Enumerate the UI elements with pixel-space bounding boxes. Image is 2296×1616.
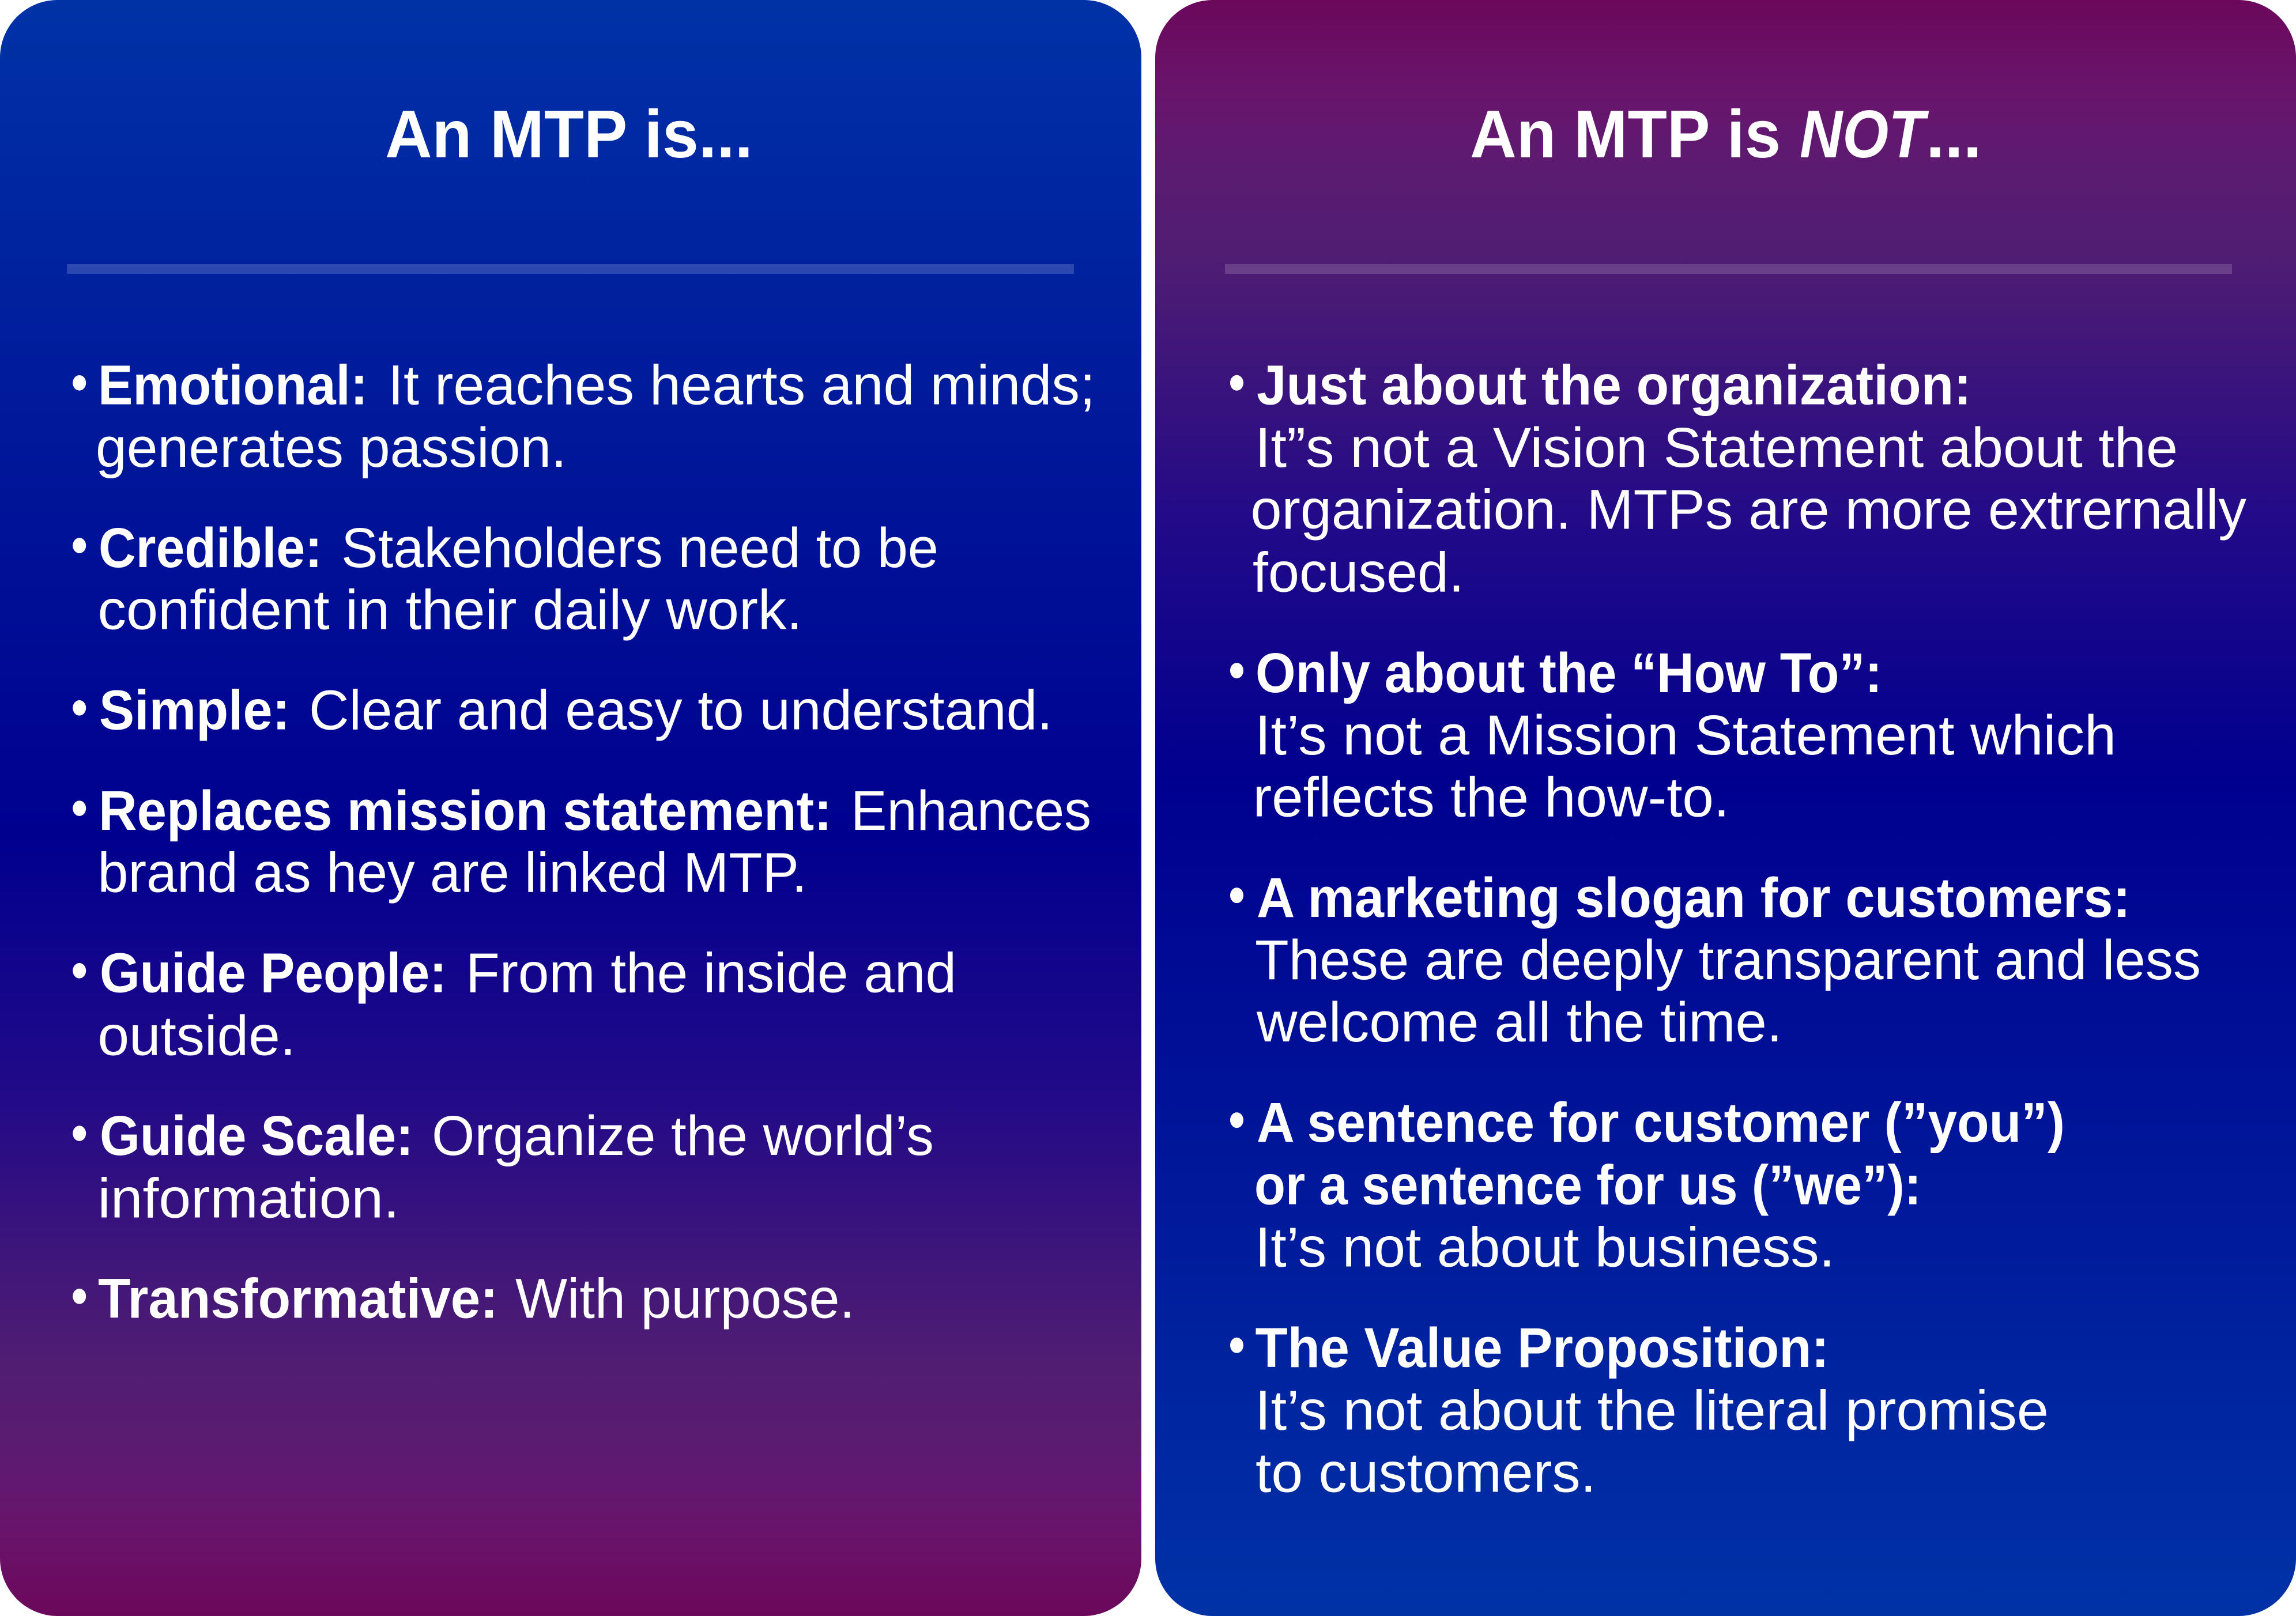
item: Replaces mission statement: Enhances <box>851 779 1091 842</box>
item: Only about the How To: Only about the “How To”: <box>1256 641 1882 704</box>
item: Replaces mission statement: Replaces mission statement: <box>99 779 832 842</box>
item: Guide Scale <box>73 1104 934 1230</box>
heading: An MTP is...: An MTP is... <box>385 96 753 172</box>
item: Simple: Clear and easy to understand. <box>309 679 1053 742</box>
panel: An MTP is NOT <box>1155 0 2296 1616</box>
item: Only about the How To: reflects the how-to. <box>1253 766 1729 829</box>
heading: An MTP is NOT...: NOT <box>1800 96 1929 172</box>
item: Guide Scale: information. <box>98 1167 399 1230</box>
item: Transformative <box>73 1267 855 1330</box>
panel background left <box>0 0 1141 1616</box>
item: A marketing slogan for customers: A marketing slogan for customers: <box>1257 866 2131 929</box>
item: Emotional: It reaches hearts and minds; <box>388 354 1095 417</box>
heading: An MTP is NOT...: ... <box>1926 96 1982 172</box>
item: Guide Scale: Guide Scale: <box>100 1104 413 1167</box>
item: Simple: Simple: <box>99 679 290 742</box>
item: The Value Proposition: to customers. <box>1256 1441 1596 1504</box>
item: Credible: Stakeholders need to be <box>341 516 938 579</box>
item: Transformative: Transformative: <box>98 1267 498 1330</box>
item: Replaces mission statement: brand as hey are linked MTP. <box>98 841 807 904</box>
item: The Value Proposition: The Value Proposition: <box>1256 1316 1829 1379</box>
item: Only about the How To <box>1230 641 2116 829</box>
item: Just about the organization: organization. MTPs are more extrernally <box>1251 478 2246 541</box>
item: A marketing slogan for customers: These are deeply transparent and less <box>1255 928 2201 991</box>
item: A marketing slogan for customers: welcome all the time. <box>1256 991 1782 1054</box>
item: Emotional: generates passion. <box>96 416 567 479</box>
heading: An MTP is NOT...: An MTP is <box>1470 96 1781 172</box>
heading: An MTP is NOT... <box>1470 96 1982 172</box>
item: Emotional: Emotional: <box>98 354 368 417</box>
item: Emotional <box>73 354 1095 479</box>
item: Transformative: With purpose. <box>515 1267 855 1330</box>
item: Guide Scale: Organize the world’s <box>432 1104 934 1167</box>
item: Just about the organization: Just about the organization: <box>1257 354 1971 417</box>
item: A marketing slogan for customers <box>1230 866 2201 1054</box>
item: A sentence for customer or us: A sentence for customer (”you”) <box>1257 1091 2065 1154</box>
panel: An MTP is <box>0 0 1141 1616</box>
item: Only about the How To: It’s not a Mission Statement which <box>1255 704 2116 767</box>
item: A sentence for customer or us: or a sentence for us (”we”): <box>1254 1154 1921 1216</box>
item: Credible <box>73 516 938 641</box>
item: Guide People: From the inside and <box>466 942 956 1005</box>
item: Guide People: Guide People: <box>100 942 447 1005</box>
item: Credible: confident in their daily work. <box>98 579 802 641</box>
item: The Value Proposition: It’s not about the literal promise <box>1255 1379 2049 1442</box>
panel background right <box>1155 0 2296 1616</box>
item: Guide People <box>73 942 956 1067</box>
item: The Value Proposition <box>1230 1316 2049 1504</box>
item: Replaces mission statement <box>73 779 1091 904</box>
item: Just about the organization: It”s not a Vision Statement about the <box>1255 416 2178 479</box>
item: Just about the organization <box>1230 354 2246 604</box>
item: Credible: Credible: <box>99 516 322 579</box>
item: A sentence for customer or us <box>1230 1091 2065 1278</box>
item: Just about the organization: focused. <box>1253 541 1464 604</box>
item: A sentence for customer or us: It’s not about business. <box>1255 1216 1835 1278</box>
item: Guide People: outside. <box>98 1005 296 1067</box>
